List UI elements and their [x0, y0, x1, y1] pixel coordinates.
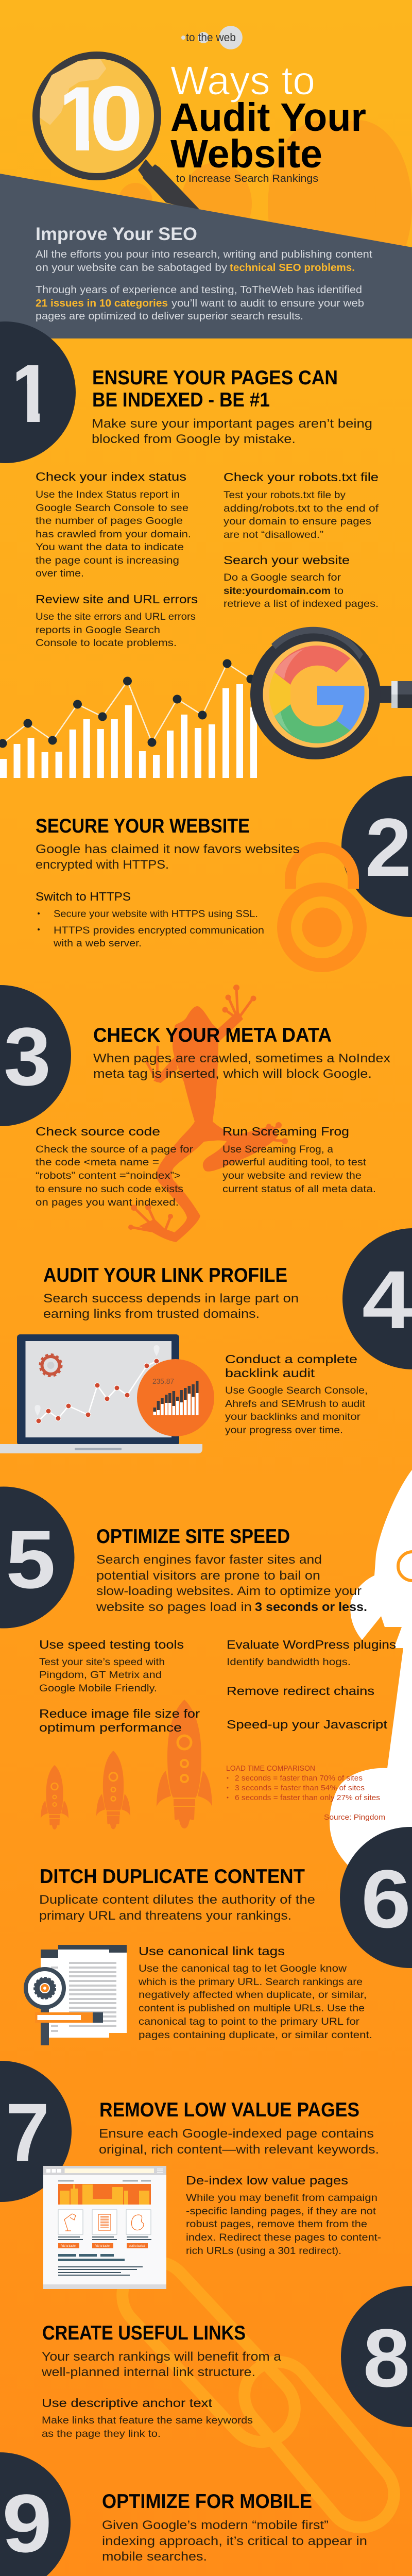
icon: web page mockup: Add to basket — [61, 2245, 76, 2248]
number badge 4: 4 — [362, 1253, 412, 1346]
block: run screaming frog: Run Screaming Frog — [222, 1125, 349, 1138]
lead text: encrypted with HTTPS. — [36, 858, 169, 872]
heading: SECURE YOUR WEBSITE — [36, 815, 250, 837]
lead text: website so pages load in — [96, 1600, 252, 1614]
lead text: well-planned internal link structure. — [41, 2365, 255, 2379]
load time comparison: Source: Pingdom — [324, 1813, 385, 1822]
lead text: Make sure your important pages aren’t being — [92, 417, 372, 431]
block: check source code: the code <meta name = — [36, 1157, 159, 1168]
number badge 2: 2 — [365, 801, 411, 893]
icon: laptop with chart — [0, 1334, 214, 1453]
block: check your index status: over time. — [36, 568, 84, 579]
block: check your index status: Check your index status — [36, 470, 186, 483]
lead text: Given Google’s modern “mobile first” — [102, 2518, 329, 2532]
block: speed testing tools: Google Mobile Friendly. — [39, 1683, 157, 1694]
block: de-index low value pages: robust pages, remove them from the — [186, 2218, 367, 2230]
lead text: Ensure each Google-indexed page contains — [99, 2127, 374, 2141]
block: check source code: to ensure no such code exists — [36, 1183, 183, 1195]
lead text: Search success depends in large part on — [43, 1292, 299, 1306]
title: Website — [170, 132, 322, 176]
heading: DITCH DUPLICATE CONTENT — [40, 1866, 305, 1888]
block: search your website: Search your website — [224, 553, 350, 567]
icon: google magnifier — [250, 627, 412, 759]
block: backlink audit: your progress over time. — [225, 1425, 343, 1436]
block: check your index status: Use the Index Status report in — [36, 489, 180, 500]
block: search your website: Do a Google search for — [224, 572, 341, 583]
block: search your website: site:yourdomain.com — [224, 585, 331, 597]
lead text — [99, 2127, 379, 2157]
block: reduce image file size: optimum performance — [39, 1721, 182, 1734]
heading: CHECK YOUR META DATA — [93, 1024, 332, 1046]
title: to Increase Search Rankings — [176, 173, 318, 184]
number badge 8 — [341, 2286, 412, 2427]
block: check your index status: You want the data to indicate — [36, 541, 184, 553]
block: canonical link tags: Use the canonical tag to let Google know — [139, 1963, 347, 1974]
lead text: primary URL and threatens your rankings. — [39, 1909, 291, 1923]
panel: section 4 — [0, 1228, 412, 1453]
lead text — [96, 1553, 367, 1614]
block: review site and url errors: Use the site errors and URL errors — [36, 611, 196, 622]
intro text: All the efforts you pour into research, writing and publishing content — [36, 249, 372, 260]
icon: laptop with chart: 235.87 — [152, 1378, 174, 1386]
block: check robots.txt: adding/robots.txt to the end of — [224, 503, 379, 514]
block: speed testing tools: Use speed testing tools — [39, 1638, 184, 1651]
block: backlink audit: Ahrefs and SEMrush to audit — [225, 1398, 366, 1410]
lead text — [102, 2518, 367, 2564]
icon: chain links — [109, 2248, 408, 2541]
block: canonical link tags: pages containing duplicate, or similar content. — [139, 2029, 372, 2041]
block: run screaming frog — [222, 1125, 376, 1195]
panel: section 7 — [0, 2061, 408, 2541]
block: run screaming frog: current status of all meta data. — [222, 1183, 376, 1195]
block: canonical link tags: Use canonical link tags — [139, 1944, 285, 1958]
block: switch to https: Secure your website with HTTPS using SSL. — [54, 908, 258, 920]
heading — [92, 367, 338, 411]
icon: magnifying glass with 10: 0 — [90, 67, 143, 170]
block: backlink audit: Use Google Search Console, — [225, 1385, 368, 1396]
block: check your index status: the number of pages Google — [36, 515, 183, 527]
number badge 4 — [342, 1228, 412, 1369]
block: reduce image file size: Reduce image file size for — [39, 1707, 200, 1720]
background blobs — [118, 120, 412, 292]
block: review site and url errors: Console to locate problems. — [36, 637, 177, 649]
icon: frog silhouette — [128, 985, 288, 1242]
block: speed testing tools — [39, 1638, 184, 1694]
number badge 6 — [340, 1827, 412, 1968]
icon: web page mockup — [43, 2166, 166, 2289]
heading: BE INDEXED - BE #1 — [92, 389, 270, 411]
number badge 1 — [0, 321, 76, 463]
number badge 3 — [0, 985, 71, 1126]
panel: header — [0, 26, 412, 338]
block: backlink audit — [225, 1352, 368, 1436]
icon: large white rocket — [330, 1470, 412, 1868]
block: canonical link tags — [138, 1944, 372, 2041]
block: check source code: Check source code — [36, 1125, 160, 1138]
block: check robots.txt: Check your robots.txt file — [224, 470, 379, 484]
icon: magnifying glass with 10 — [36, 55, 199, 211]
heading: OPTIMIZE FOR MOBILE — [102, 2490, 312, 2513]
logo: to the web — [186, 31, 236, 44]
block: descriptive anchor text: Make links that feature the same keywords — [42, 2415, 253, 2426]
block: switch to https: with a web server. — [53, 938, 142, 949]
block: check your index status: Google Search Console to see — [36, 502, 188, 514]
block: search your website: retrieve a list of indexed pages. — [224, 598, 379, 609]
number badge 8: 8 — [363, 2312, 410, 2404]
lead text: potential visitors are prone to bail on — [96, 1569, 320, 1583]
block: speed testing tools: Test your site’s speed with — [39, 1656, 165, 1668]
block: check source code: on pages you want indexed. — [36, 1197, 179, 1208]
load time comparison: 6 seconds = faster than only 27% of sites — [235, 1793, 380, 1802]
lead text: Google has claimed it now favors websites — [36, 842, 300, 856]
block: review site and url errors — [36, 592, 198, 649]
block: check source code: “robots” content =“noindex”> — [36, 1170, 181, 1181]
intro text: pages are optimized to deliver superior search results. — [36, 311, 303, 322]
block: descriptive anchor text — [42, 2396, 253, 2439]
block: check source code — [36, 1125, 194, 1208]
heading: AUDIT YOUR LINK PROFILE — [43, 1264, 287, 1286]
lead text: Your search rankings will benefit from a — [42, 2350, 282, 2364]
block: canonical link tags: which is the primary URL. Search rankings are — [138, 1976, 363, 1988]
icon: web page mockup: Add to basket — [95, 2245, 110, 2248]
panel: intro — [0, 174, 412, 338]
block: de-index low value pages: rich URLs (using a 301 redirect). — [186, 2245, 341, 2257]
block: switch to https: Switch to HTTPS — [36, 890, 131, 903]
heading: ENSURE YOUR PAGES CAN — [92, 367, 338, 389]
block: review site and url errors: Review site and URL errors — [36, 592, 198, 606]
lead text — [39, 1893, 315, 1923]
icon: magnifying glass with 10: 1 — [55, 67, 106, 170]
block: search your website: to — [334, 585, 344, 597]
number badge 5: 5 — [6, 1513, 56, 1605]
heading: REMOVE LOW VALUE PAGES — [99, 2099, 359, 2121]
block: review site and url errors: reports in Google Search — [36, 624, 160, 636]
title — [170, 58, 366, 184]
block: wordpress plugins: Identify bandwidth hogs. — [227, 1656, 351, 1668]
number badge 6: 6 — [361, 1853, 411, 1945]
block: de-index low value pages: index. Redirect these pages to content- — [186, 2232, 381, 2243]
lead text — [43, 1292, 299, 1321]
load time comparison: 3 seconds = faster than 54% of sites — [235, 1784, 365, 1792]
lead text — [92, 417, 372, 446]
heading: OPTIMIZE SITE SPEED — [96, 1526, 290, 1548]
number badge 5 — [0, 1487, 74, 1628]
lead text — [41, 2350, 282, 2379]
block: de-index low value pages — [186, 2174, 381, 2257]
number badge 2 — [341, 776, 412, 917]
panel: section 2 — [36, 776, 412, 974]
lead text: mobile searches. — [102, 2550, 207, 2564]
lead text: When pages are crawled, sometimes a NoIndex — [93, 1052, 390, 1065]
block: speed up javascript: Speed-up your Javascript — [227, 1718, 388, 1731]
heading: CREATE USEFUL LINKS — [42, 2322, 246, 2344]
panel: section 3 — [0, 985, 390, 1242]
lead text: blocked from Google by mistake. — [92, 432, 296, 446]
icon: documents with magnifier — [26, 1945, 127, 2045]
block: backlink audit: Conduct a complete — [225, 1352, 357, 1366]
number badge 1: 1 — [8, 347, 54, 439]
lead text: 3 seconds or less. — [255, 1600, 367, 1614]
lead text: Duplicate content dilutes the authority of the — [39, 1893, 315, 1907]
block: de-index low value pages: De-index low value pages — [186, 2174, 348, 2187]
block: canonical link tags: negatively affected when duplicate, or similar, — [139, 1989, 367, 2001]
lead text: earning links from trusted domains. — [43, 1307, 260, 1321]
lead text — [93, 1052, 390, 1081]
icon: web page mockup: Add to basket — [129, 2245, 145, 2248]
block: run screaming frog: powerful auditing tool, to test — [222, 1157, 367, 1168]
block: check source code: Check the source of a page for — [36, 1144, 194, 1155]
lead text: original, rich content—with relevant keywords. — [99, 2143, 379, 2157]
block: run screaming frog: Use Screaming Frog, a — [222, 1144, 333, 1155]
block: wordpress plugins — [227, 1638, 396, 1668]
block: canonical link tags: content is published on multiple URLs. Use the — [139, 2003, 365, 2014]
load time comparison: LOAD TIME COMPARISON — [226, 1764, 315, 1773]
block: redirect chains: Remove redirect chains — [227, 1684, 374, 1698]
lead text — [36, 842, 300, 872]
block: check your index status: has crawled from your domain. — [36, 529, 191, 540]
block: speed testing tools: Pingdom, GT Metrix and — [39, 1669, 162, 1681]
panel: section 8 — [41, 2286, 412, 2439]
load time comparison: 2 seconds = faster than 70% of sites — [235, 1774, 363, 1783]
panel: section 9 — [0, 2452, 380, 2576]
block: switch to https: HTTPS provides encrypted communication — [54, 925, 264, 936]
icon: padlock — [275, 848, 369, 974]
block: backlink audit: backlink audit — [225, 1366, 315, 1380]
block: check robots.txt: your domain to ensure pages — [224, 516, 371, 527]
lead text: meta tag is inserted, which will block Google. — [93, 1067, 372, 1081]
block: check robots.txt: Test your robots.txt file by — [224, 489, 346, 501]
number badge 7: 7 — [6, 2086, 49, 2178]
block: wordpress plugins: Evaluate WordPress plugins — [227, 1638, 396, 1651]
block: canonical link tags: canonical tag to point to the primary URL for — [139, 2016, 360, 2027]
lead text: Search engines favor faster sites and — [96, 1553, 322, 1567]
heading: improve your seo: Improve Your SEO — [36, 224, 197, 244]
panel: section 5 — [0, 1470, 412, 1868]
number badge 9: 9 — [2, 2477, 52, 2569]
bar chart — [0, 659, 257, 778]
block: run screaming frog: your website and review the — [222, 1170, 362, 1181]
block: check your index status — [36, 470, 191, 579]
block: de-index low value pages: -specific landing pages, if they are not — [186, 2206, 376, 2217]
block: check your index status: the page count is increasing — [36, 555, 179, 566]
lead text: indexing approach, it’s critical to appear in — [102, 2534, 367, 2548]
panel: section 1 — [0, 321, 412, 778]
intro text: Through years of experience and testing, ToTheWeb has identified — [36, 284, 362, 296]
number badge 7 — [0, 2061, 72, 2202]
block: de-index low value pages: While you may benefit from campaign — [186, 2192, 377, 2204]
intro text: you’ll want to audit to ensure your web — [171, 298, 364, 309]
block: check robots.txt — [224, 470, 379, 540]
lead text: slow-loading websites. Aim to optimize your — [96, 1584, 362, 1598]
intro text: 21 issues in 10 categories — [36, 298, 168, 309]
intro text: technical SEO problems. — [230, 262, 355, 274]
logo — [181, 26, 243, 49]
load time comparison — [226, 1764, 385, 1822]
intro text — [36, 249, 372, 322]
block: descriptive anchor text: as the page they link to. — [42, 2428, 161, 2439]
title: Ways to — [170, 58, 315, 103]
number badge 9 — [0, 2452, 71, 2576]
panel: section 6 — [26, 1827, 412, 2045]
icons: three rockets — [41, 1700, 212, 1829]
block: reduce image file size — [39, 1707, 200, 1734]
block: search your website — [224, 553, 379, 609]
number badge 3: 3 — [4, 1010, 51, 1103]
block: descriptive anchor text: Use descriptive anchor text — [42, 2396, 213, 2410]
intro text: on your website can be sabotaged by — [36, 262, 227, 274]
block: check robots.txt: are not “disallowed.” — [224, 529, 323, 540]
title: Audit Your — [170, 95, 366, 140]
block: switch to https — [36, 890, 264, 949]
block: backlink audit: your backlinks and monitor — [225, 1411, 361, 1422]
